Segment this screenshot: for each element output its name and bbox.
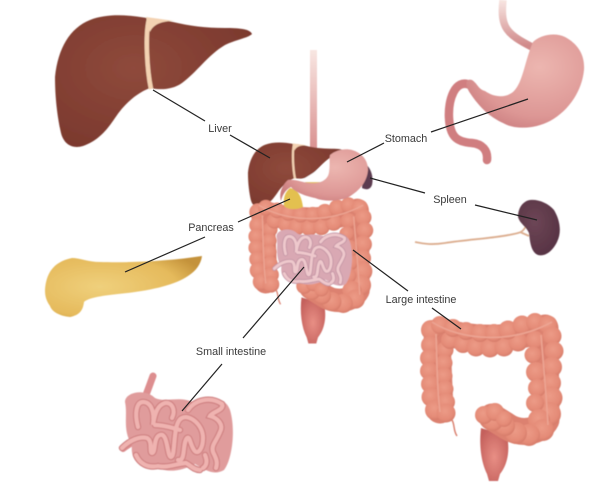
large liver	[55, 15, 252, 147]
central digestive system	[248, 50, 373, 343]
leader line: pancreas	[125, 199, 290, 272]
leader line: stomach	[347, 99, 528, 162]
leader line: spleen	[370, 178, 537, 220]
label: Liver: Liver	[208, 123, 232, 135]
central pancreas	[284, 182, 328, 209]
large stomach with esophagus and duodenum	[449, 0, 584, 160]
large spleen with vessel	[415, 200, 560, 255]
gap between liver and stomach	[298, 158, 332, 188]
central stomach	[280, 149, 368, 201]
leader line: small intestine	[182, 267, 304, 411]
leader line: liver	[153, 90, 270, 158]
large pancreas	[45, 256, 202, 317]
leader line: large intestine	[353, 250, 461, 329]
label: Spleen: Spleen	[433, 194, 467, 206]
label: Large intestine: Large intestine	[386, 294, 456, 306]
label: Stomach: Stomach	[385, 133, 427, 145]
central large intestine	[248, 197, 373, 343]
central liver	[248, 142, 344, 207]
large intestine	[420, 313, 564, 481]
label: Small intestine: Small intestine	[196, 346, 266, 358]
esophagus	[310, 50, 317, 152]
central spleen	[362, 163, 373, 189]
small intestine	[122, 376, 233, 472]
label: Pancreas: Pancreas	[188, 222, 234, 234]
central small intestine	[274, 230, 352, 286]
